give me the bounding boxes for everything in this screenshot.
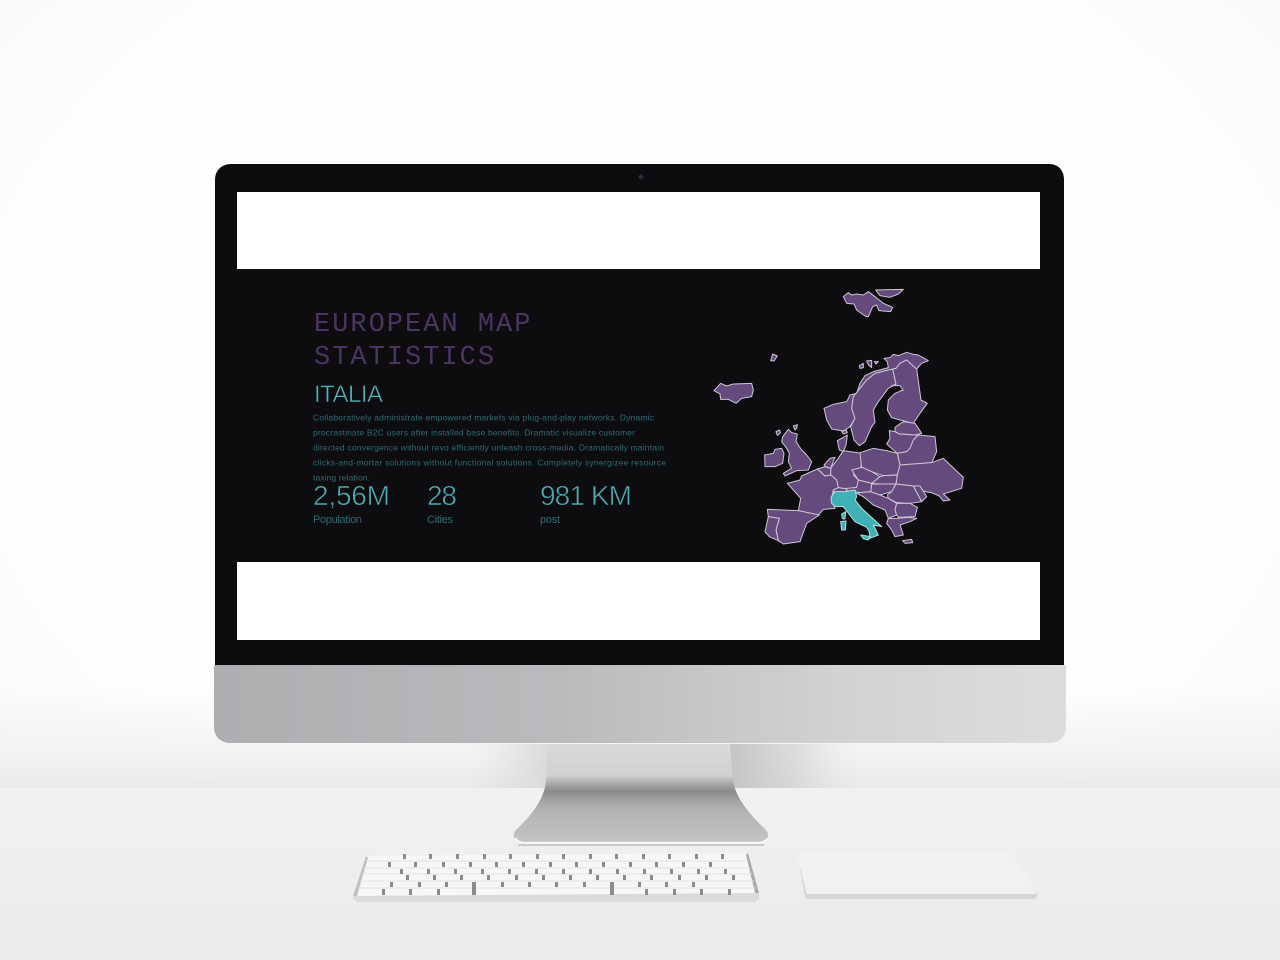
body paragraph: procrastinate B2C users after installed base benefits. Dramatic visualize customer xyxy=(313,428,635,438)
trackpad xyxy=(797,853,1037,899)
stat: cities: Cities xyxy=(427,514,454,526)
stat: post: post xyxy=(540,514,560,526)
heading: country name: ITALIA xyxy=(314,381,383,408)
netherlands xyxy=(824,457,835,468)
bulgaria xyxy=(895,503,917,517)
stat: cities: 28 xyxy=(427,480,457,511)
stat: post: 981 KM xyxy=(540,480,632,511)
spain xyxy=(767,509,819,544)
germany xyxy=(831,451,862,489)
scandinavia xyxy=(824,352,928,446)
body paragraph: taxing relation. xyxy=(313,472,370,482)
iceland xyxy=(714,383,753,403)
stat: population xyxy=(313,480,390,526)
body paragraph: clicks-and-mortar solutions without functional solutions. Completely synergizee resource xyxy=(313,458,666,468)
title: EUROPEAN MAP xyxy=(314,310,532,340)
france xyxy=(787,469,838,515)
denmark xyxy=(837,435,847,452)
belarus xyxy=(897,435,937,465)
romania xyxy=(887,484,922,503)
keyboard keys xyxy=(382,854,735,895)
latvia and lithuania xyxy=(887,431,918,453)
norway xyxy=(824,352,928,431)
greece xyxy=(887,517,917,537)
western europe xyxy=(765,425,862,544)
monitor xyxy=(214,164,1066,743)
stat: cities xyxy=(427,480,457,526)
balkans xyxy=(857,492,897,518)
ireland xyxy=(765,448,784,467)
portugal xyxy=(765,517,779,541)
europe map xyxy=(714,289,963,544)
moldova xyxy=(913,486,927,502)
monitor stand xyxy=(514,744,768,845)
crete xyxy=(903,539,913,543)
czechia xyxy=(852,467,880,483)
slovakia xyxy=(872,475,897,484)
finland xyxy=(887,360,927,423)
title xyxy=(314,310,532,373)
slide screen xyxy=(237,192,1040,640)
ukraine xyxy=(896,458,963,501)
estonia xyxy=(895,422,922,435)
united kingdom xyxy=(782,429,812,476)
north sea islands xyxy=(776,430,781,435)
monitor chin xyxy=(214,665,1066,743)
stat: post xyxy=(540,480,632,526)
monitor bezel xyxy=(215,164,1064,665)
belgium xyxy=(817,467,831,476)
body paragraph: directed convergence without revo efficiently unleash cross-media. Dramatically maintain xyxy=(313,442,664,452)
italy highlighted xyxy=(831,490,882,540)
hungary xyxy=(871,484,896,495)
stat: population: Population xyxy=(313,514,362,526)
austria xyxy=(847,480,872,493)
sweden xyxy=(851,369,896,446)
webcam xyxy=(638,174,644,180)
keyboard xyxy=(353,853,759,902)
arctic islands xyxy=(714,289,903,403)
body paragraph: Collaboratively administrate empowered markets via plug-and-play networks. Dynamic xyxy=(313,412,655,422)
barents islands xyxy=(859,363,863,368)
body paragraph xyxy=(313,412,666,482)
switzerland xyxy=(833,488,847,493)
title: STATISTICS xyxy=(314,343,496,373)
eastern europe xyxy=(847,422,963,543)
stat: population: 2,56M xyxy=(313,480,390,511)
poland xyxy=(860,448,900,476)
